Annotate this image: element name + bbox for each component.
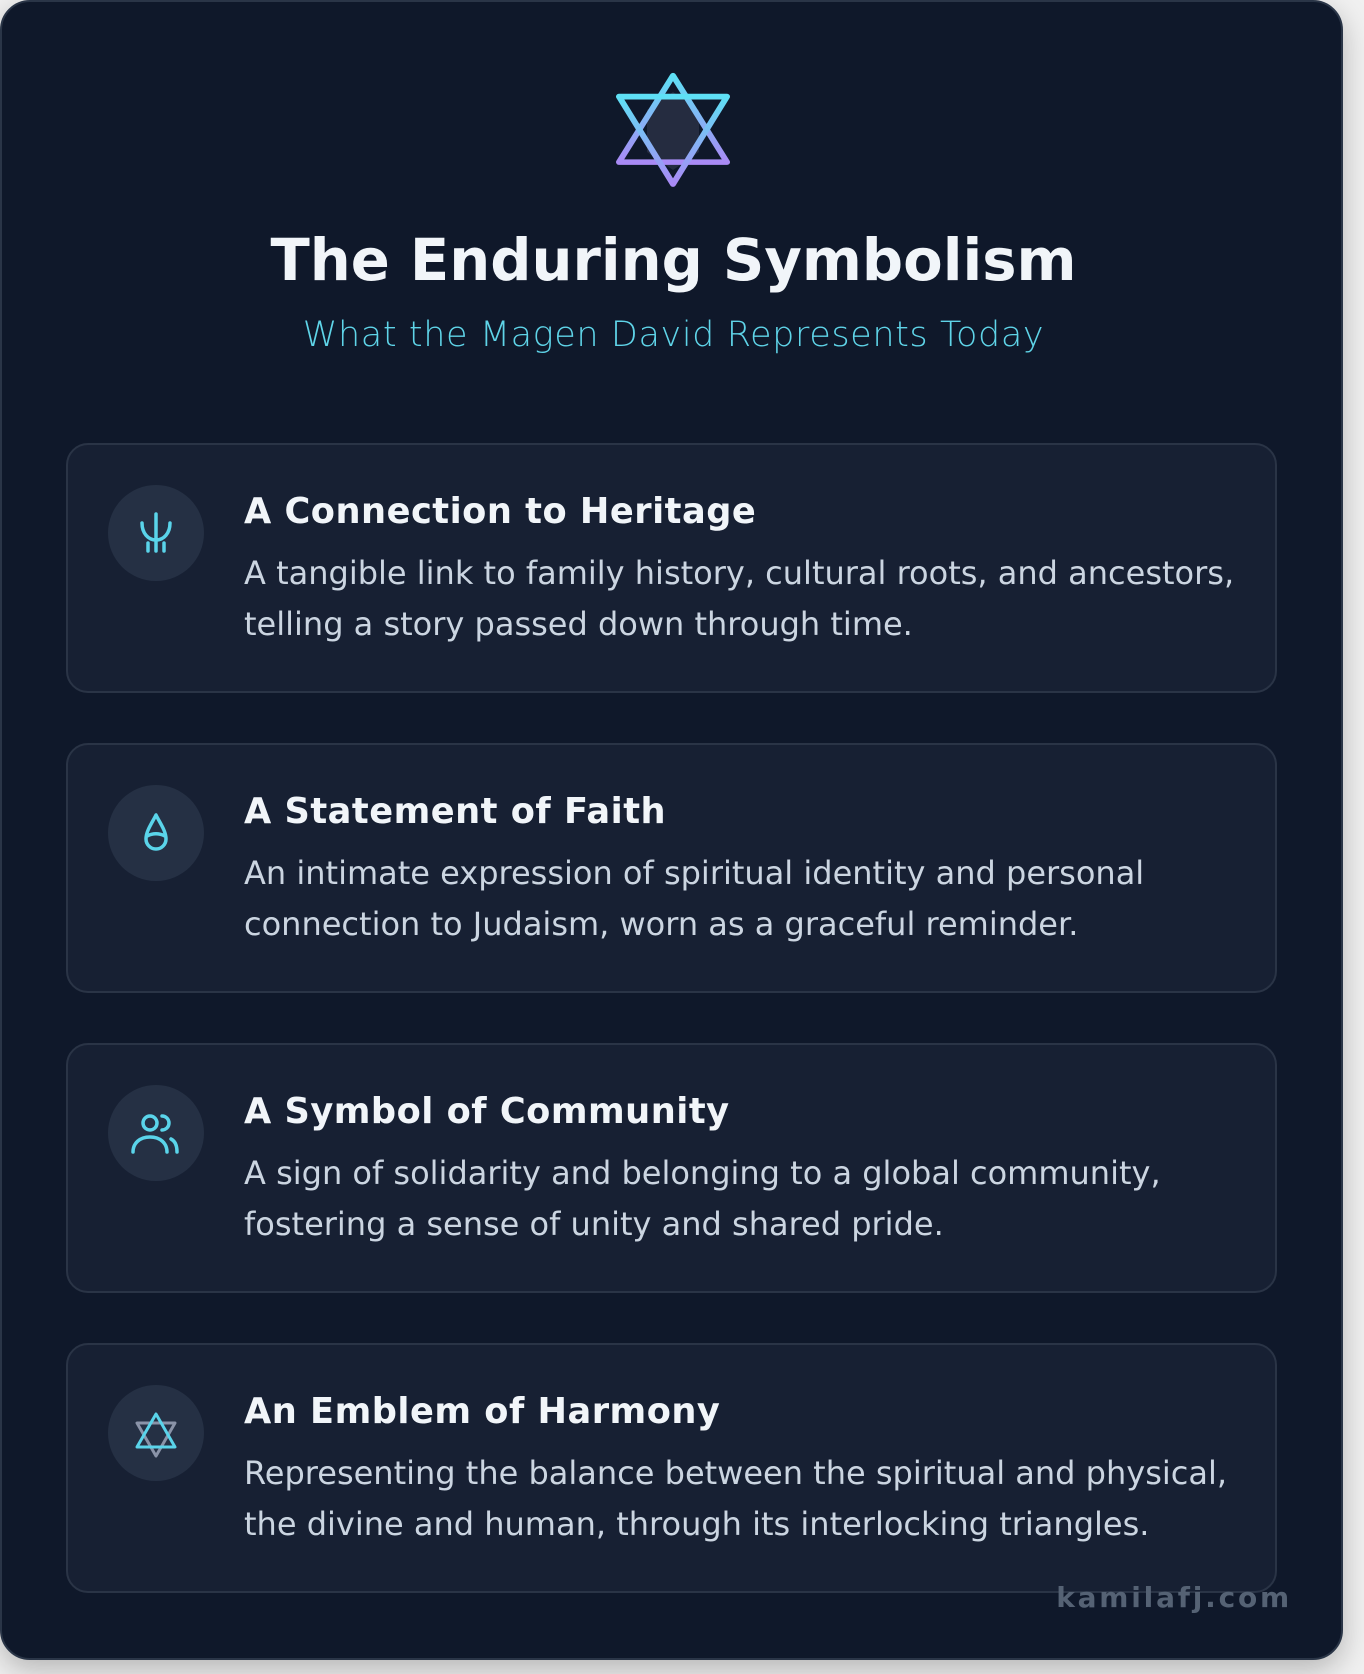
- text: A tangible link to family history, cultural roots, and ancestors, telling a story passed down through time.: [244, 554, 1234, 643]
- text: An intimate expression of spiritual identity and personal connection to Judaism, worn as a graceful reminder.: [244, 854, 1144, 943]
- panel: heritage: [66, 443, 1277, 693]
- icon: star of david: [616, 72, 730, 187]
- subtitle: What the Magen David Represents Today: [303, 315, 1044, 355]
- heading: A Symbol of Community: [244, 1091, 730, 1132]
- icon: small star: [108, 1385, 204, 1481]
- title: The Enduring Symbolism: [270, 227, 1076, 294]
- heading: An Emblem of Harmony: [244, 1391, 720, 1432]
- panel: community: [66, 1043, 1277, 1293]
- text: A sign of solidarity and belonging to a global community, fostering a sense of unity and shared pride.: [244, 1154, 1161, 1243]
- text: Representing the balance between the spiritual and physical, the divine and human, through its interlocking triangles.: [244, 1454, 1227, 1543]
- watermark: kamilafj.com: [1056, 1581, 1292, 1614]
- panel: harmony: [66, 1343, 1277, 1593]
- heading: A Statement of Faith: [244, 791, 666, 832]
- icon: people: [108, 1085, 204, 1181]
- heading: A Connection to Heritage: [244, 491, 756, 532]
- panel: faith: [66, 743, 1277, 993]
- icon: roots: [108, 485, 204, 581]
- icon: flame: [108, 785, 204, 881]
